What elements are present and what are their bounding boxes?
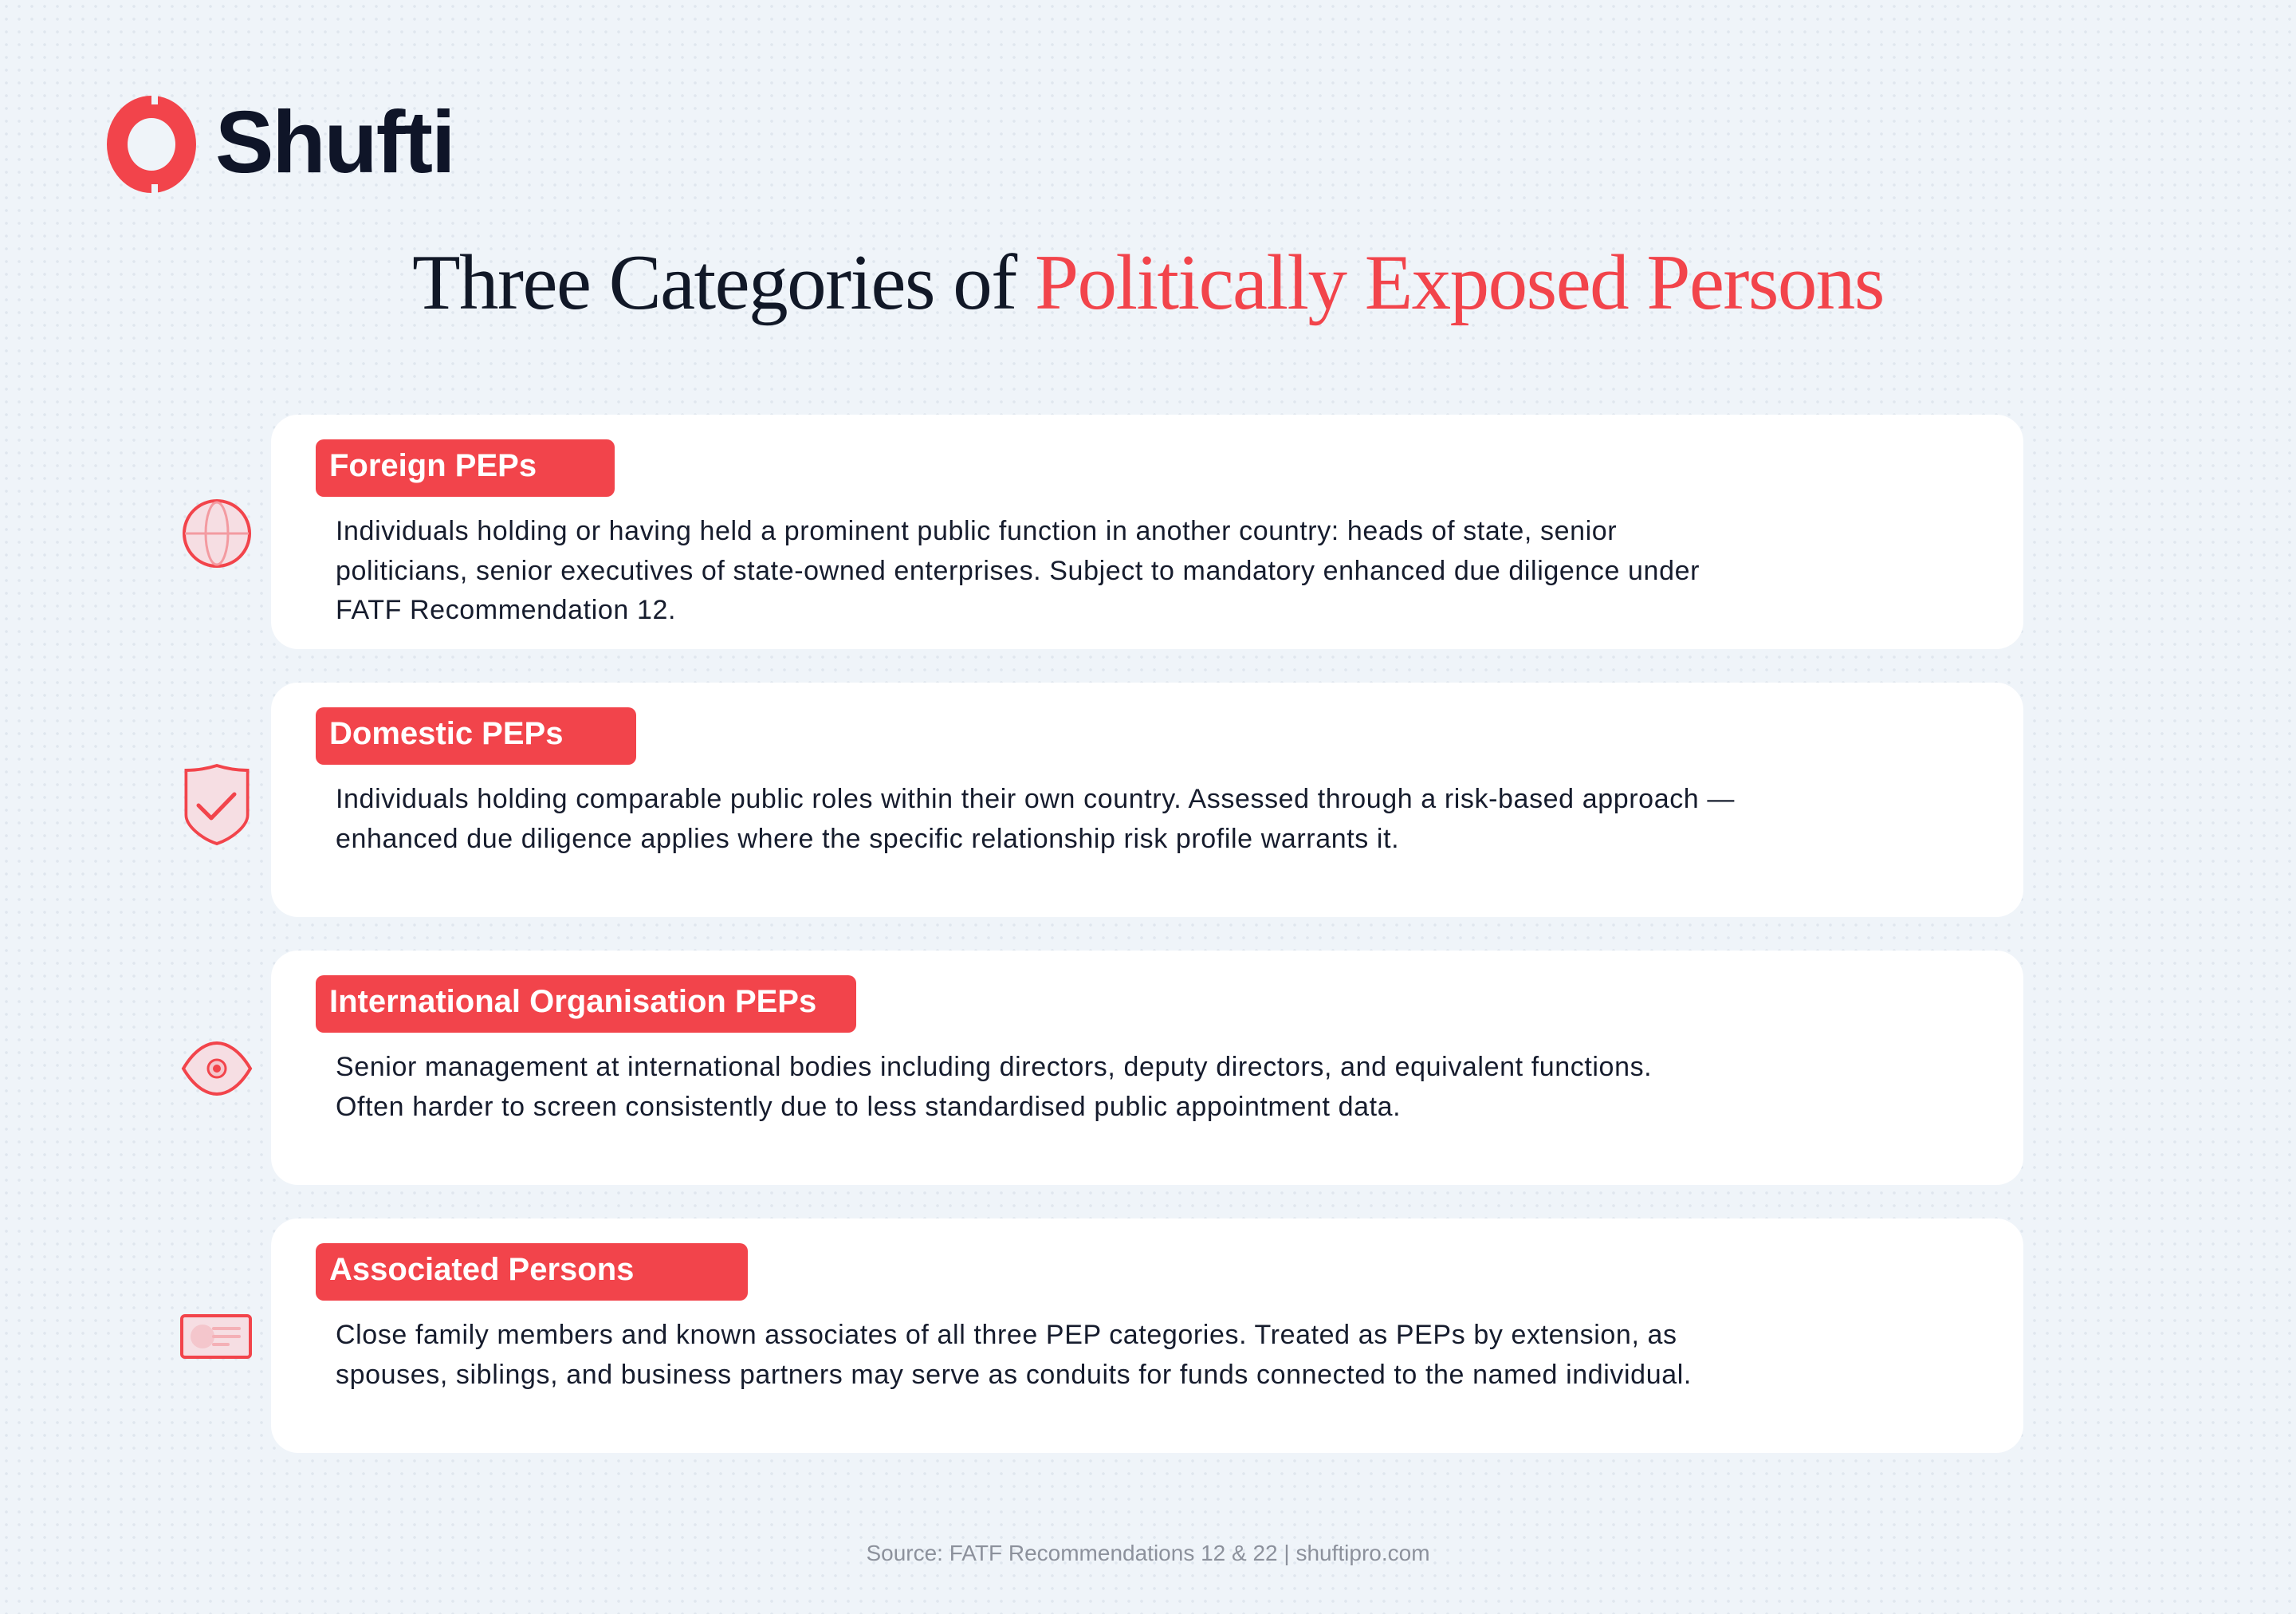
text: international description: Often harder to screen consistently due to less standardised public appointment data. xyxy=(336,1092,1401,1122)
text: international description: Senior management at international bodies including directors, deputy directors, and equivalent functions. xyxy=(336,1052,1652,1082)
text: domestic description: Individuals holding comparable public roles within their own country. Assessed through a risk-based approach — xyxy=(336,784,1735,814)
panel: Foreign PEPs xyxy=(271,415,2023,649)
text: domestic description xyxy=(336,784,1735,854)
label: Foreign PEPs xyxy=(316,439,615,497)
panel: International Organisation PEPs xyxy=(271,951,2023,1185)
text: foreign description: politicians, senior executives of state-owned enterprises. Subject to mandatory enhanced due diligence under xyxy=(336,556,1700,586)
text: associated description: Close family members and known associates of all three PEP categories. Treated as PEPs by extension, as xyxy=(336,1320,1677,1350)
panel: Domestic PEPs xyxy=(271,683,2023,917)
icon: logo ring xyxy=(107,96,196,193)
label: International Organisation PEPs: International Organisation PEPs xyxy=(329,984,816,1019)
footer source: Source: FATF Recommendations 12 & 22 | shuftipro.com xyxy=(866,1541,1430,1565)
text: foreign description: Individuals holding or having held a prominent public function in another country: heads of state, senior xyxy=(336,516,1617,546)
icon: eye xyxy=(182,1041,252,1096)
panel: Associated Persons xyxy=(271,1218,2023,1453)
logo text: Shufti xyxy=(215,93,454,191)
text: international description xyxy=(336,1052,1652,1122)
logo xyxy=(107,93,454,193)
label: International Organisation PEPs xyxy=(316,975,856,1033)
text: associated description: spouses, siblings, and business partners may serve as conduits for funds connected to the named individual. xyxy=(336,1360,1692,1390)
icon: ID card xyxy=(180,1314,252,1359)
text: domestic description: enhanced due diligence applies where the specific relationship risk profile warrants it. xyxy=(336,824,1399,854)
label: Foreign PEPs: Foreign PEPs xyxy=(329,448,537,483)
label: Associated Persons xyxy=(316,1243,748,1301)
label: Associated Persons: Associated Persons xyxy=(329,1252,634,1287)
label: Domestic PEPs xyxy=(316,707,636,765)
title: Three Categories of Politically Exposed Persons xyxy=(412,239,1884,326)
icon: globe xyxy=(183,499,251,568)
text: foreign description xyxy=(336,516,1700,625)
text: associated description xyxy=(336,1320,1692,1390)
text: foreign description: FATF Recommendation 12. xyxy=(336,595,676,625)
icon: shield xyxy=(185,764,249,845)
label: Domestic PEPs: Domestic PEPs xyxy=(329,716,563,751)
